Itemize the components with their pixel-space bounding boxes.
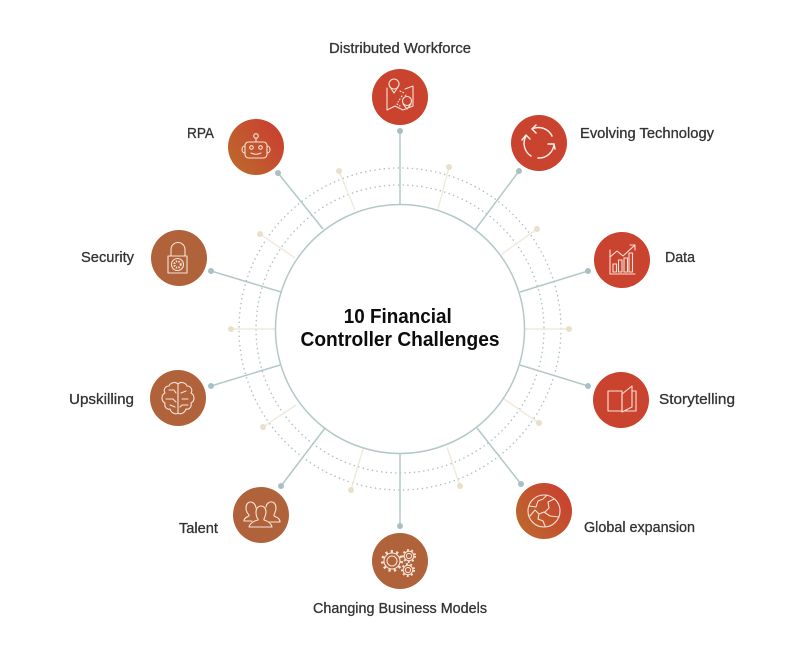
icon: open book — [593, 372, 649, 428]
item: Storytelling — [593, 372, 735, 428]
icon: people — [233, 487, 289, 543]
item: Evolving Technology: Evolving Technology — [580, 125, 714, 142]
icon: brain — [150, 370, 206, 426]
item: Evolving Technology — [511, 115, 714, 171]
item: Changing Business Models — [313, 533, 487, 617]
icon: map with pins — [372, 69, 428, 125]
item: Talent — [179, 487, 289, 543]
item: Data: Data — [665, 249, 696, 266]
item: Talent: Talent — [179, 520, 219, 537]
tan secondary spokes — [228, 164, 572, 493]
item: RPA: RPA — [187, 125, 214, 142]
item: Upskilling — [69, 370, 206, 426]
icon: robot — [228, 119, 284, 175]
item: RPA — [187, 119, 284, 175]
item: Global expansion: Global expansion — [584, 519, 695, 536]
icon: padlock — [151, 230, 207, 286]
icon: bar chart with trend — [594, 232, 650, 288]
item: Distributed Workforce — [329, 40, 471, 125]
item: Security — [81, 230, 207, 286]
item: Global expansion — [516, 483, 695, 539]
item: Storytelling: Storytelling — [659, 391, 735, 408]
central circle — [276, 204, 524, 454]
item: Distributed Workforce: Distributed Workforce — [329, 40, 471, 57]
title: 10 Financial — [344, 306, 452, 328]
item: Upskilling: Upskilling — [69, 391, 134, 408]
title: Controller Challenges — [300, 329, 500, 351]
item: Data — [594, 232, 696, 288]
icon: gears — [372, 533, 428, 589]
icon: cycle arrows — [511, 115, 567, 171]
item: Changing Business Models: Changing Business Models — [313, 600, 487, 617]
item: Security: Security — [81, 249, 134, 266]
connector spokes — [208, 128, 591, 529]
dotted rings — [239, 168, 561, 490]
icon: globe — [516, 483, 572, 539]
